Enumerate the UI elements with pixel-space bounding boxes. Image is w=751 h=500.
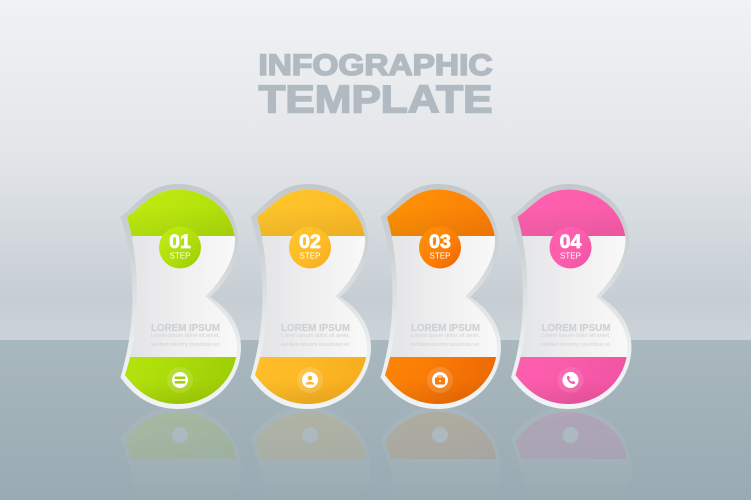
text block 03: Lorem ipsum dolor sit amet, bbox=[411, 333, 480, 339]
icon: link bbox=[167, 367, 193, 393]
icon: person bbox=[297, 367, 323, 393]
floor reflections bbox=[125, 412, 626, 459]
text block 04: Lorem ipsum dolor sit amet, bbox=[542, 333, 611, 339]
title: TEMPLATE bbox=[258, 78, 492, 122]
text block 02: sed diam nonummy consectetuer ed. bbox=[281, 342, 350, 348]
panel: step 02 bbox=[250, 184, 371, 409]
icon: phone bbox=[558, 367, 584, 393]
text block 03: LOREM IPSUM bbox=[411, 322, 480, 334]
text block 03 bbox=[411, 322, 480, 348]
step badge 01: STEP bbox=[170, 252, 190, 260]
step badge 04: 04 bbox=[560, 231, 581, 253]
panel: step 01 bbox=[120, 184, 241, 409]
text block 01: Lorem ipsum dolor sit amet, bbox=[151, 333, 220, 339]
panel: step 04 bbox=[511, 184, 632, 409]
text block 02: LOREM IPSUM bbox=[281, 322, 350, 334]
step badge 02: STEP bbox=[300, 252, 320, 260]
step badge 03: 03 bbox=[429, 231, 451, 253]
text block 04: LOREM IPSUM bbox=[542, 322, 611, 334]
step badge 02: 02 bbox=[299, 231, 321, 253]
text block 03: sed diam nonummy consectetuer ed. bbox=[411, 342, 480, 348]
text block 01: sed diam nonummy consectetuer ed. bbox=[151, 342, 220, 348]
step badge 02 bbox=[289, 226, 331, 268]
title: INFOGRAPHIC bbox=[258, 49, 492, 82]
title bbox=[258, 49, 492, 122]
text block 04: sed diam nonummy consectetuer ed. bbox=[542, 342, 611, 348]
text block 02: Lorem ipsum dolor sit amet, bbox=[281, 333, 350, 339]
step badge 04 bbox=[550, 226, 592, 268]
step badge 01 bbox=[159, 226, 201, 268]
step badge 01: 01 bbox=[169, 231, 191, 253]
text block 02 bbox=[281, 322, 350, 348]
text block 04 bbox=[542, 322, 611, 348]
text block 01 bbox=[151, 322, 220, 348]
step badge 03 bbox=[419, 226, 461, 268]
icon: briefcase bbox=[427, 367, 453, 393]
panel: step 03 bbox=[380, 184, 501, 409]
step badge 04: STEP bbox=[560, 252, 581, 260]
background floor bbox=[0, 340, 751, 500]
step badge 03: STEP bbox=[430, 252, 450, 260]
background wall bbox=[0, 0, 751, 340]
text block 01: LOREM IPSUM bbox=[151, 322, 220, 334]
